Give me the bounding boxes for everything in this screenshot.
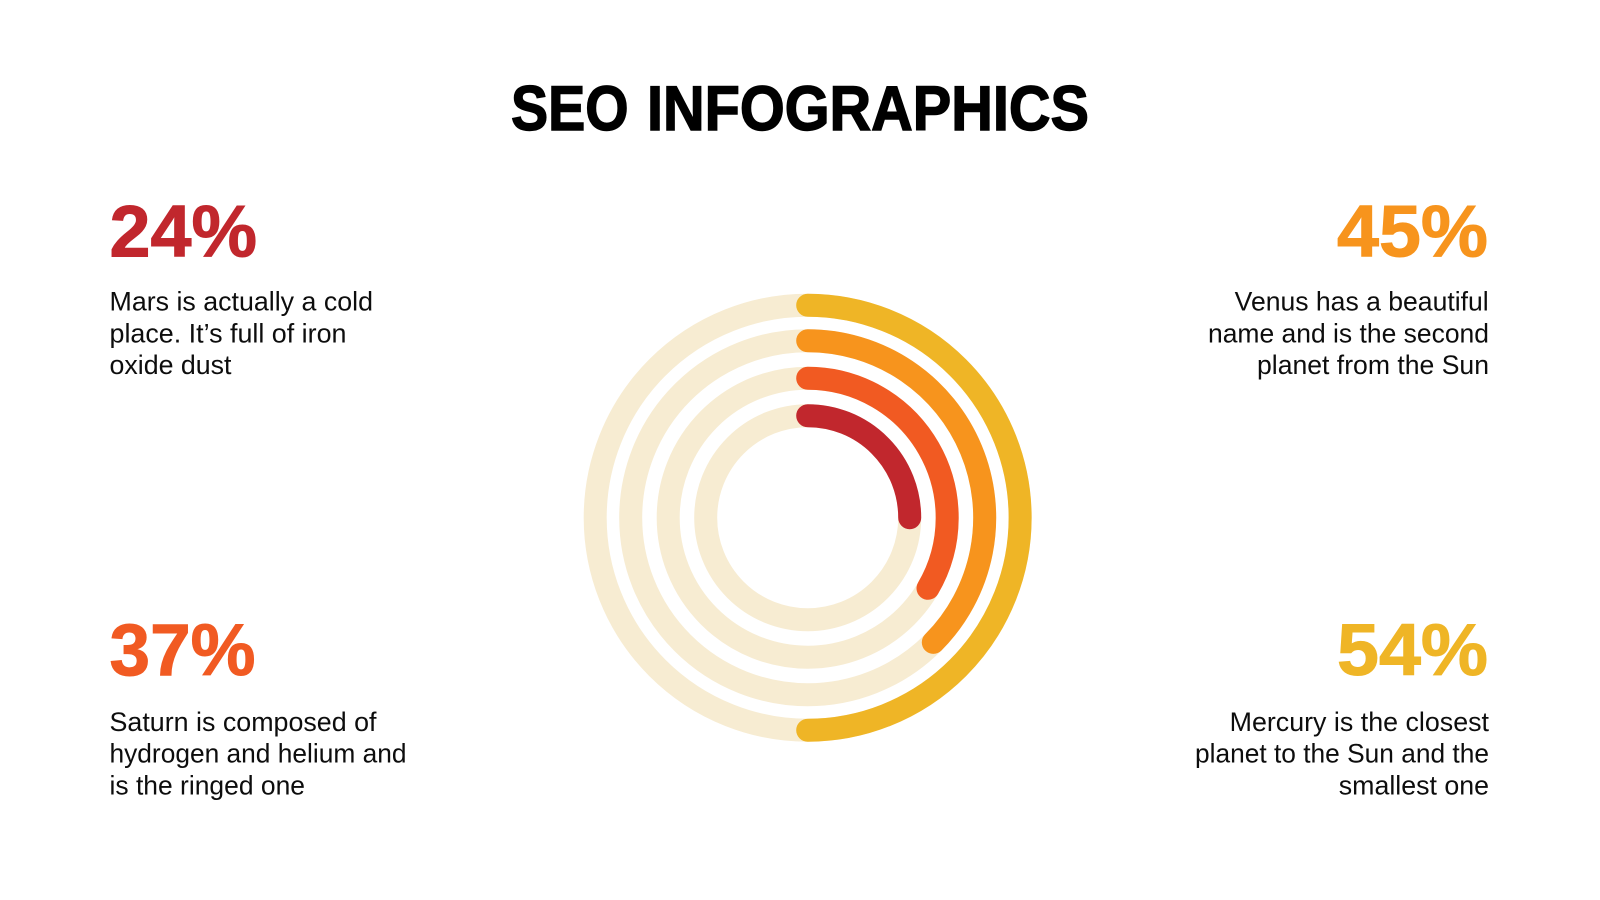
panel: Venus 45% [1208,192,1489,380]
text: Venus description: name and is the second [1208,318,1489,348]
stat: 45%: 45% [1337,192,1488,272]
text: Mercury description: planet to the Sun and the [1195,739,1489,769]
text: Mercury description: Mercury is the closest [1230,707,1490,737]
stat: 37%: 37% [110,610,256,691]
panel: Saturn 37% [110,610,406,800]
text: Saturn description: is the ringed one [110,770,305,800]
text: Venus description: Venus has a beautiful [1235,287,1489,317]
text: Mercury description [1195,707,1490,800]
arc: Saturn 37% [808,378,947,588]
panel: Mercury 54% [1195,610,1490,800]
arc: Mercury 54% [808,305,1020,730]
text: Saturn description: Saturn is composed of [110,707,377,737]
radial progress chart [595,305,1020,730]
text: Venus description: planet from the Sun [1257,350,1489,380]
text: Saturn description [110,707,406,800]
stat: 54%: 54% [1337,610,1488,691]
ring tracks [595,305,1020,730]
text: Mercury description: smallest one [1339,770,1489,800]
text: Saturn description: hydrogen and helium and [110,739,406,769]
arc: Mars 24% [808,416,910,518]
text: Mars description: oxide dust [110,350,232,380]
text: Mars description: Mars is actually a cold [110,287,373,317]
arc: Venus 45% [808,341,985,642]
panel: Mars 24% [110,192,373,380]
text: Mars description [110,287,373,380]
text: Venus description [1208,287,1489,380]
title: INFOGRAPHICS [647,74,1089,144]
text: Mars description: place. It’s full of iron [110,318,346,348]
stat: 24%: 24% [110,192,257,272]
title: SEO [511,74,628,144]
